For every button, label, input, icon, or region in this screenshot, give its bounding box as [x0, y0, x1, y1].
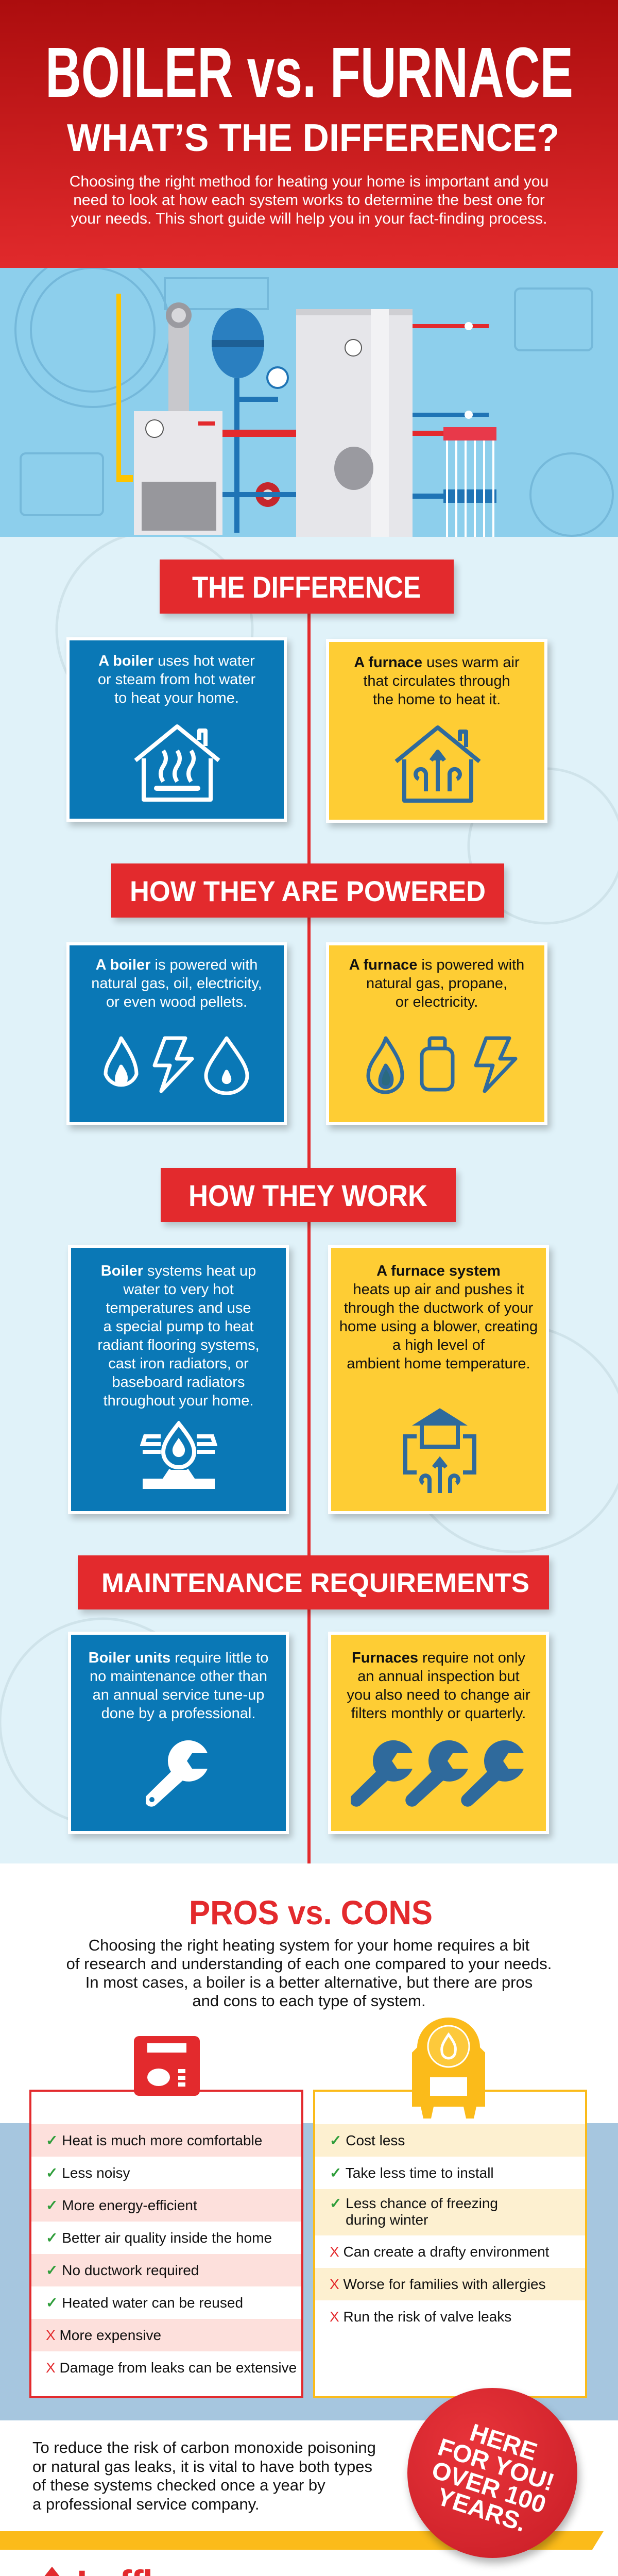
- panel: boiler work: baseboard radiators: [112, 1374, 245, 1391]
- pros cons intro text: and cons to each type of system.: [192, 1992, 426, 2010]
- panel: boiler pros cons: ✓ Heat is much more comfortable: [46, 2132, 262, 2148]
- blue band behind lists: [0, 2123, 618, 2420]
- panel: boiler power: [66, 942, 287, 1125]
- panel: boiler difference: to heat your home.: [114, 690, 239, 706]
- illustration band: boiler system: [0, 268, 618, 537]
- closing text: a professional service company.: [32, 2495, 260, 2513]
- panel: furnace difference: that circulates through: [363, 673, 510, 689]
- panel: boiler maintenance: no maintenance other than: [90, 1668, 267, 1685]
- panel: furnace difference: A furnace uses warm air: [354, 654, 520, 671]
- panel: furnace work: through the ductwork of your: [344, 1300, 533, 1316]
- panel: furnace work: home using a blower, creating: [339, 1318, 538, 1335]
- heading: how they work: HOW THEY WORK: [188, 1179, 427, 1213]
- panel: boiler difference: [66, 637, 287, 822]
- timeline end dot: [304, 1878, 314, 1887]
- panel: furnace maintenance: Furnaces require not only: [352, 1650, 525, 1666]
- badge: here for you: [407, 2388, 577, 2558]
- icon: house with heat: [134, 724, 220, 802]
- small boiler: [134, 411, 222, 535]
- panel: furnace pros cons: X Worse for families with allergies: [330, 2276, 546, 2292]
- panel: furnace maintenance: an annual inspection but: [357, 1668, 520, 1685]
- intro paragraph: [70, 173, 548, 227]
- panel: boiler pros cons: [29, 2090, 303, 2398]
- panel: furnace work: a high level of: [392, 1337, 485, 1353]
- icons: flame, bolt, drop: [104, 1037, 249, 1095]
- panel: furnace power: A furnace is powered with: [349, 957, 524, 973]
- panel: furnace pros cons: X Can create a drafty environment: [330, 2244, 549, 2260]
- title: WHAT’S THE DIFFERENCE?: [67, 116, 559, 159]
- background decorative circles: [0, 537, 618, 1820]
- badge: here for you: HERE: [467, 2419, 540, 2466]
- red pipe: [222, 430, 296, 437]
- pros vs cons section background: [0, 1863, 618, 2576]
- panel: furnace power: or electricity.: [396, 994, 478, 1010]
- badge: here for you: OVER 100: [428, 2456, 549, 2519]
- badge: here for you: YEARS.: [434, 2483, 529, 2537]
- icon: yellow furnace: [412, 2018, 485, 2119]
- panel: boiler work: radiant flooring systems,: [97, 1337, 260, 1353]
- expansion tank: [212, 308, 264, 378]
- panel: boiler difference: or steam from hot water: [98, 671, 255, 688]
- icon: house with air: [394, 725, 481, 803]
- big tank: [296, 309, 413, 537]
- title: [45, 33, 573, 159]
- panel: furnace maintenance: filters monthly or quarterly.: [351, 1705, 526, 1722]
- intro paragraph: Choosing the right method for heating your home is important and you: [70, 173, 548, 190]
- icon: ductwork: [403, 1408, 476, 1493]
- icons: flame, propane tank, bolt: [367, 1037, 517, 1094]
- yellow stripe: [0, 2531, 604, 2550]
- panel: boiler maintenance: an annual service tune-up: [93, 1687, 264, 1703]
- panel: boiler maintenance: done by a professional.: [101, 1705, 255, 1722]
- pros cons intro text: of research and understanding of each one compared to your needs.: [66, 1955, 552, 1973]
- panel: furnace pros cons: ✓ Less chance of freezing: [330, 2195, 498, 2211]
- pump: [255, 482, 280, 507]
- panel: furnace work: A furnace system: [376, 1263, 501, 1279]
- heading: the difference: [160, 560, 454, 614]
- heading: maintenance requirements: MAINTENANCE REQUIREMENTS: [101, 1568, 529, 1598]
- pros cons intro text: [66, 1936, 552, 2010]
- panel: boiler pros cons: ✓ More energy-efficient: [46, 2197, 197, 2213]
- right pipes: [413, 324, 489, 328]
- panel: boiler power: natural gas, oil, electricity,: [91, 975, 262, 992]
- panel: furnace difference: [326, 639, 547, 823]
- closing text: or natural gas leaks, it is vital to have both types: [32, 2458, 372, 2475]
- panel: furnace work: heats up air and pushes it: [353, 1281, 524, 1298]
- panel: boiler work: throughout your home.: [104, 1393, 253, 1409]
- closing text: of these systems checked once a year by: [32, 2476, 325, 2494]
- panel: boiler work: Boiler systems heat up: [101, 1263, 256, 1279]
- panel: furnace pros cons: [313, 2090, 587, 2398]
- yellow gas pipe: [116, 294, 121, 479]
- header panel: [0, 0, 618, 268]
- badge: here for you: FOR YOU!: [435, 2433, 558, 2497]
- panel: boiler work: water to very hot: [123, 1281, 234, 1298]
- panel: boiler work: [68, 1245, 289, 1514]
- panel: furnace pros cons: during winter: [346, 2212, 428, 2228]
- icon: boiler flame: [140, 1421, 217, 1489]
- panel: boiler pros cons: ✓ Heated water can be reused: [46, 2295, 243, 2311]
- icon: red thermostat: [134, 2036, 200, 2096]
- heading: maintenance requirements: [78, 1555, 549, 1609]
- panel: boiler work: cast iron radiators, or: [108, 1355, 249, 1372]
- closing text: To reduce the risk of carbon monoxide poisoning: [32, 2438, 376, 2456]
- icon: wrench: [146, 1740, 208, 1807]
- panel: furnace work: [328, 1245, 549, 1514]
- icons: three wrenches: [351, 1740, 524, 1807]
- closing text: [32, 2438, 376, 2513]
- panel: boiler pros cons: ✓ Less noisy: [46, 2165, 130, 2181]
- pros cons intro text: Choosing the right heating system for your home requires a bit: [89, 1936, 529, 1954]
- heading: how they are powered: [111, 863, 504, 918]
- panel: furnace difference: the home to heat it.: [373, 691, 501, 708]
- center timeline line: [307, 592, 311, 1882]
- heading: the difference: THE DIFFERENCE: [192, 571, 421, 604]
- panel: boiler work: temperatures and use: [106, 1300, 251, 1316]
- flue pipe: [168, 314, 189, 412]
- panel: furnace pros cons: ✓ Take less time to install: [330, 2165, 494, 2181]
- panel: boiler pros cons: X More expensive: [46, 2327, 161, 2343]
- panel: furnace maintenance: you also need to change air: [347, 1687, 530, 1703]
- panel: boiler maintenance: Boiler units require little to: [89, 1650, 268, 1666]
- panel: furnace pros cons: X Run the risk of valve leaks: [330, 2309, 511, 2325]
- panel: furnace work: ambient home temperature.: [347, 1355, 530, 1372]
- panel: furnace power: [326, 942, 547, 1125]
- panel: boiler power: A boiler is powered with: [96, 957, 258, 973]
- panel: furnace pros cons: ✓ Cost less: [330, 2132, 405, 2148]
- panel: boiler pros cons: ✓ No ductwork required: [46, 2262, 199, 2278]
- heading: how they are powered: HOW THEY ARE POWERED: [130, 875, 486, 907]
- panel: boiler difference: A boiler uses hot water: [98, 653, 255, 669]
- panel: boiler pros cons: X Damage from leaks can be extensive: [46, 2360, 297, 2376]
- panel: furnace power: natural gas, propane,: [366, 975, 507, 992]
- intro paragraph: need to look at how each system works to determine the best one for: [73, 192, 545, 209]
- panel: boiler pros cons: ✓ Better air quality inside the home: [46, 2230, 272, 2246]
- pros cons intro text: In most cases, a boiler is a better alternative, but there are pros: [85, 1973, 533, 1991]
- panel: boiler work: a special pump to heat: [104, 1318, 253, 1335]
- intro paragraph: your needs. This short guide will help you in your fact-finding process.: [71, 210, 547, 227]
- panel: boiler power: or even wood pellets.: [106, 994, 247, 1010]
- heading: how they work: [161, 1168, 456, 1222]
- panel: furnace maintenance: [328, 1632, 549, 1834]
- panel: boiler maintenance: [68, 1632, 289, 1834]
